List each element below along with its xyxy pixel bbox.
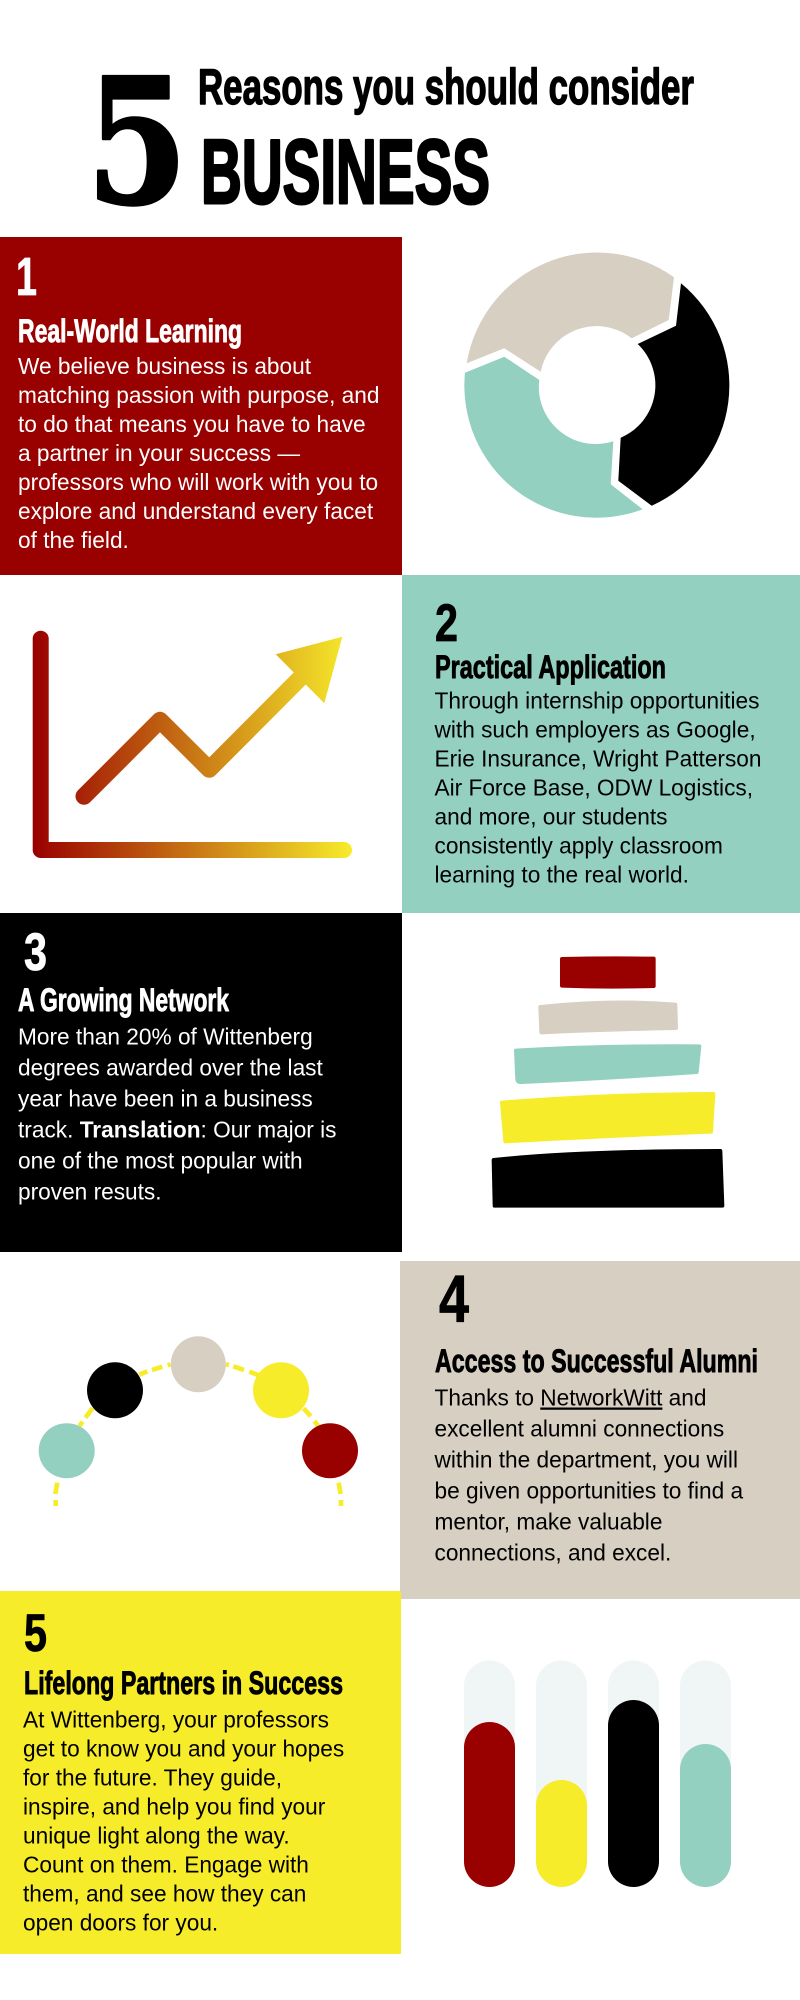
body text 1: We believe business is about xyxy=(18,353,312,379)
body text 4: mentor, make valuable xyxy=(434,1508,662,1534)
body text 3: track. Translation: Our major is xyxy=(18,1116,337,1142)
dotted arc with five circles xyxy=(39,1336,358,1506)
heading: Real-World Learning: Real-World Learning xyxy=(18,313,242,349)
body text 2: Erie Insurance, Wright Patterson xyxy=(434,746,762,772)
body text 4: connections, and excel. xyxy=(434,1540,671,1566)
circle: black xyxy=(87,1362,143,1418)
body text 4: Thanks to NetworkWitt and xyxy=(434,1384,706,1410)
body text 1: matching passion with purpose, and xyxy=(18,382,379,408)
pill: teal xyxy=(680,1660,731,1887)
body text 3: proven resuts. xyxy=(18,1178,162,1204)
heading: Lifelong Partners in Success: Lifelong Partners in Success xyxy=(24,1665,343,1701)
title xyxy=(86,41,694,245)
body text 2: learning to the real world. xyxy=(434,862,689,888)
panel: reason 5 xyxy=(0,1591,401,1954)
body text 2: Through internship opportunities xyxy=(434,688,759,714)
body text 5: inspire, and help you find your xyxy=(23,1794,326,1820)
body text 5 xyxy=(23,1706,344,1936)
circle: teal xyxy=(39,1423,95,1478)
donut chart xyxy=(464,253,729,518)
pill bar chart xyxy=(464,1660,731,1887)
body text 5: Count on them. Engage with xyxy=(23,1852,309,1878)
number 4: 4 xyxy=(439,1262,469,1337)
panel: reason 3 xyxy=(0,913,402,1252)
pill: yellow xyxy=(536,1660,587,1887)
body text 5: get to know you and your hopes xyxy=(23,1736,344,1762)
number 1: 1 xyxy=(16,247,37,307)
title line 2: BUSINESS xyxy=(201,122,490,223)
body text 2: consistently apply classroom xyxy=(434,832,723,858)
stacked pyramid bars xyxy=(494,958,722,1206)
body text 1: a partner in your success — xyxy=(18,440,300,466)
body text 5: for the future. They guide, xyxy=(23,1764,282,1790)
body text 4: excellent alumni connections xyxy=(434,1416,724,1442)
panel: reason 1 xyxy=(0,237,402,575)
body text 3: one of the most popular with xyxy=(18,1148,303,1174)
body text 2: with such employers as Google, xyxy=(434,716,756,742)
number 2: 2 xyxy=(435,594,458,653)
body text 3 xyxy=(18,1024,337,1204)
panel: reason 4 xyxy=(400,1261,800,1599)
circle: yellow xyxy=(253,1362,309,1418)
body text 4: within the department, you will xyxy=(434,1446,738,1472)
line chart icon with arrow xyxy=(41,637,344,850)
pill: red xyxy=(464,1660,515,1887)
body text 5: open doors for you. xyxy=(23,1910,218,1936)
body text 2 xyxy=(434,688,762,888)
heading: Practical Application: Practical Application xyxy=(435,649,666,685)
dashed arc xyxy=(55,1364,341,1506)
body text 2: Air Force Base, ODW Logistics, xyxy=(434,774,753,800)
body text 1: professors who will work with you to xyxy=(18,469,378,495)
body text 1: explore and understand every facet xyxy=(18,498,374,524)
body text 4 xyxy=(434,1384,743,1566)
body text 2: and more, our students xyxy=(434,804,668,830)
number 5: 5 xyxy=(24,1604,47,1663)
body text 1: to do that means you have to have xyxy=(18,411,366,437)
big numeral 5: 5 xyxy=(86,41,188,245)
heading: A Growing Network: A Growing Network xyxy=(18,982,229,1018)
body text 5: At Wittenberg, your professors xyxy=(23,1706,329,1732)
body text 3: More than 20% of Wittenberg xyxy=(18,1024,313,1050)
body text 1 xyxy=(18,353,379,553)
body text 5: unique light along the way. xyxy=(23,1822,290,1848)
circle: beige xyxy=(171,1336,226,1392)
pill: black xyxy=(608,1660,659,1887)
body text 5: them, and see how they can xyxy=(23,1880,306,1906)
number 3: 3 xyxy=(24,923,47,982)
circle: red xyxy=(302,1423,358,1478)
body text 3: year have been in a business xyxy=(18,1086,313,1112)
body text 1: of the field. xyxy=(18,527,129,553)
body text 4: be given opportunities to find a xyxy=(434,1478,743,1504)
body text 3: degrees awarded over the last xyxy=(18,1054,323,1080)
panel: reason 2 xyxy=(402,575,800,913)
